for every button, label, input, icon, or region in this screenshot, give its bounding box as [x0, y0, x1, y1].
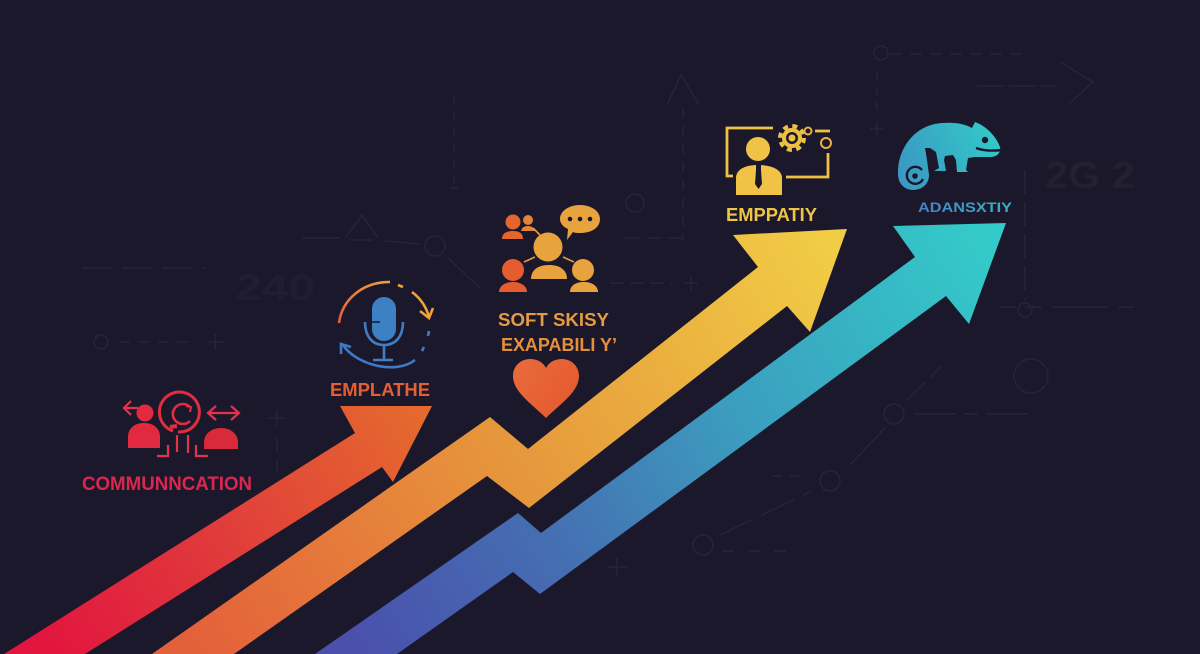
connector lines — [524, 228, 574, 262]
center ring with C — [159, 392, 199, 432]
label: adaptability garbled: ADANSXTIY — [918, 199, 1013, 215]
label: exapabili y: EXAPABILI Y’ — [501, 334, 617, 355]
right person — [204, 428, 238, 449]
icon: chameleon — [898, 122, 1002, 190]
frame — [727, 128, 830, 177]
mic stand — [365, 322, 403, 360]
center person — [531, 232, 567, 279]
label: emppatiy: EMPPATIY — [726, 205, 817, 225]
arrows and brackets — [124, 401, 239, 456]
icon: communication people — [124, 392, 239, 456]
small people — [502, 214, 535, 239]
chameleon body — [898, 122, 1000, 190]
background faint numerals left: 240 — [235, 267, 315, 308]
mic body — [372, 297, 396, 341]
right person — [570, 259, 598, 292]
icon: microphone with cycle arrows — [339, 282, 433, 367]
speech bubble — [560, 205, 600, 240]
label: soft skisy: SOFT SKISY — [498, 309, 610, 330]
mic notch — [371, 321, 380, 323]
chameleon details — [907, 148, 1002, 184]
label: emplathe: EMPLATHE — [330, 379, 430, 400]
chameleon spiral center — [912, 173, 918, 179]
large gear — [780, 126, 804, 150]
label: communication: COMMUNNCATION — [82, 474, 252, 495]
background faint numerals right: 2G 2 — [1045, 155, 1135, 197]
arrow: red to orange — [4, 406, 432, 654]
left person — [128, 404, 160, 448]
chameleon eye — [982, 137, 988, 143]
cycle blue arc — [341, 331, 429, 367]
left person — [499, 259, 527, 292]
icon: heart — [513, 359, 579, 418]
person — [736, 137, 782, 195]
icon: business person with gears — [727, 126, 831, 195]
background faint technical pattern — [82, 46, 1135, 577]
icon: group conversation — [499, 205, 600, 292]
cycle orange arc — [339, 282, 433, 323]
arrow: orange to yellow — [152, 229, 847, 654]
arrow: blue to teal — [315, 223, 1006, 654]
small rings — [804, 128, 831, 148]
